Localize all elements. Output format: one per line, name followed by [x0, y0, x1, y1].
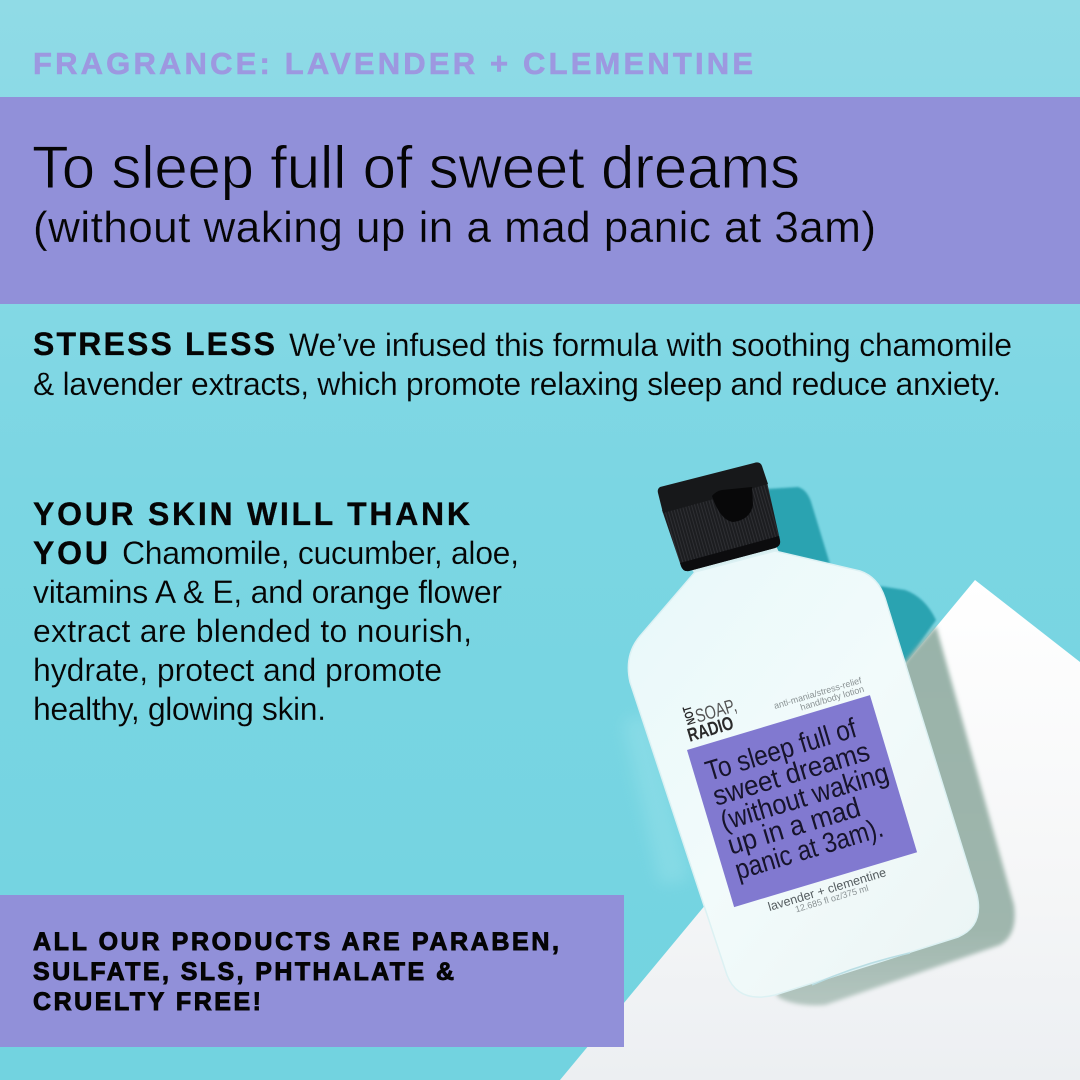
text block: your skin will thank you: YOUR SKIN WILL THANK: [33, 496, 470, 532]
callout text: ALL OUR PRODUCTS ARE PARABEN,: [33, 928, 559, 956]
panel: free-from callout: [0, 895, 624, 1047]
label main text: (without waking: [717, 757, 892, 837]
callout text: SULFATE, SLS, PHTHALATE &: [33, 958, 454, 986]
text block: stress less: We’ve infused this formula with soothing chamomile: [289, 327, 1012, 363]
text block: your skin will thank you: vitamins A & E, and orange flower: [33, 574, 502, 610]
callout text: [33, 928, 559, 1016]
flip lid: [658, 462, 768, 513]
logo: [680, 692, 744, 747]
white paper panel: [560, 580, 1080, 1080]
logo: RADIO: [685, 713, 736, 747]
headline: To sleep full of sweet dreams: [32, 134, 800, 201]
logo: NOT: [680, 704, 699, 727]
cap bottom rim: [680, 536, 780, 571]
callout text: CRUELTY FREE!: [33, 988, 261, 1016]
bottle cap: [658, 462, 780, 571]
label main text: panic at 3am).: [731, 812, 887, 885]
sub-headline: (without waking up in a mad panic at 3am): [33, 203, 876, 252]
bottle shadow on white paper: [760, 626, 1015, 1005]
cap hinge cut-out: [712, 487, 753, 522]
text block: your skin will thank you: Chamomile, cucumber, aloe,: [122, 535, 519, 571]
purple label and product text: [675, 654, 924, 931]
product: lotion bottle: [622, 462, 978, 997]
scent and size text: 12.685 fl oz/375 ml: [794, 883, 870, 914]
panel: headline band: [0, 97, 1080, 304]
text block: your skin will thank you: YOU: [33, 535, 108, 571]
text block: your skin will thank you: extract are blended to nourish,: [33, 613, 472, 649]
bottle neck: [690, 544, 781, 578]
text block: stress less: STRESS LESS: [33, 326, 275, 362]
scent and size text: lavender + clementine: [766, 865, 888, 914]
bottle base edge: [812, 953, 910, 985]
label main text: up in a mad: [724, 791, 864, 861]
ribbed cap collar: [662, 482, 780, 571]
logo: SOAP,: [693, 695, 739, 728]
label main text: [702, 707, 907, 885]
text block: your skin will thank you: [33, 496, 519, 727]
text block: your skin will thank you: hydrate, protect and promote: [33, 652, 442, 688]
bottle shadow on teal: [767, 487, 936, 662]
text block: stress less: & lavender extracts, which promote relaxing sleep and reduce anxiety.: [33, 366, 1001, 402]
product type text: anti-mania/stress-relief: [773, 675, 863, 711]
label main text: sweet dreams: [709, 735, 873, 812]
product type text: hand/body lotion: [799, 684, 865, 712]
text block: stress less: [33, 326, 1012, 402]
label main text: To sleep full of: [702, 712, 860, 787]
fragrance heading: FRAGRANCE: LAVENDER + CLEMENTINE: [33, 46, 753, 81]
text block: your skin will thank you: healthy, glowing skin.: [33, 691, 326, 727]
bottle refraction on teal: [622, 715, 690, 885]
bottle body: [628, 551, 978, 997]
